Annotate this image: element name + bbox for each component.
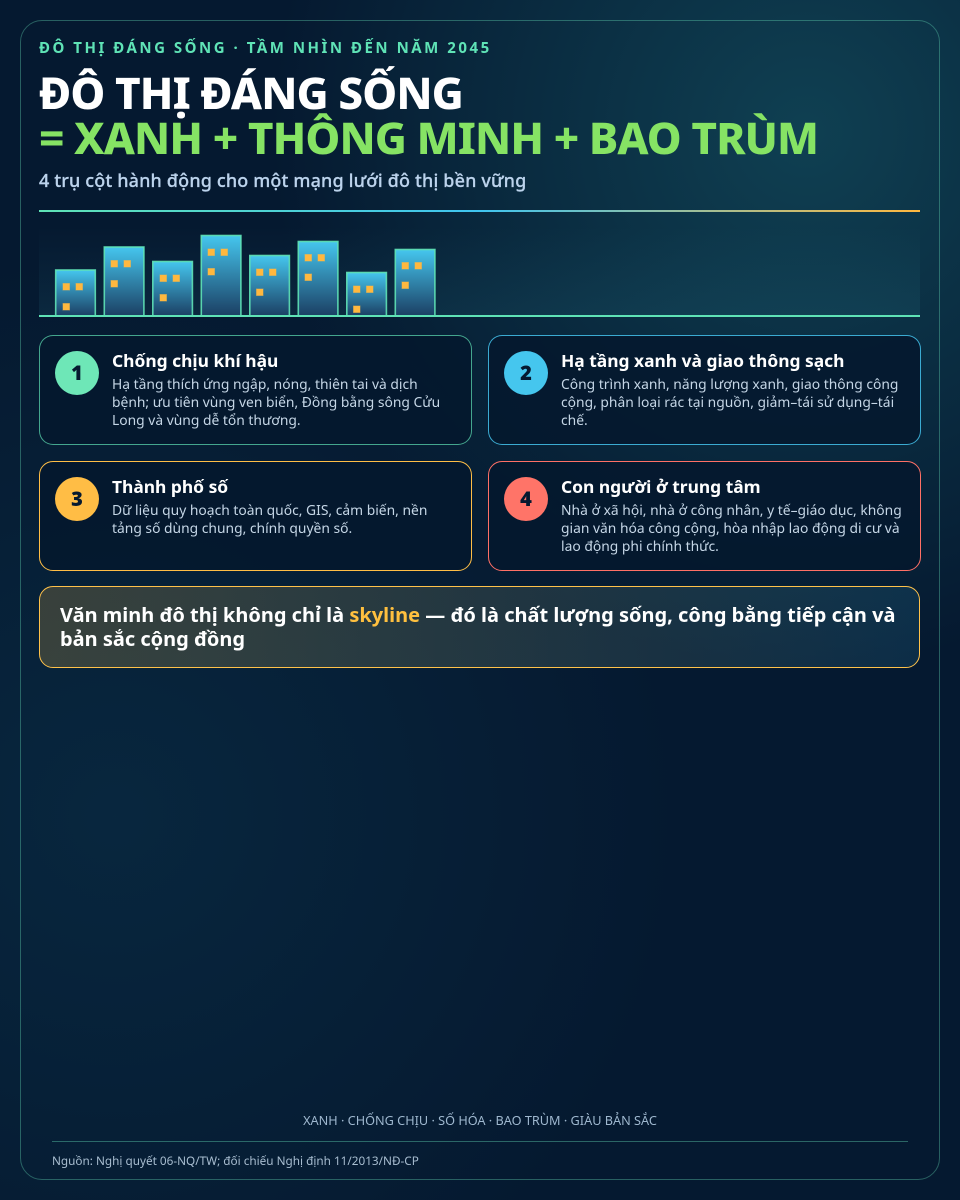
number badge 3: [55, 477, 99, 521]
heading 4: Con người ở trung tâm: [561, 475, 761, 499]
number badge 2: [504, 351, 548, 395]
callout: [39, 586, 920, 668]
source: Nguồn: Nghị quyết 06-NQ/TW; đối chiếu Nghị định 11/2013/NĐ-CP: [52, 1153, 419, 1169]
tagline: XANH · CHỐNG CHỊU · SỐ HÓA · BAO TRÙM · GIÀU BẢN SẮC: [303, 1111, 657, 1129]
text 4: Nhà ở xã hội, nhà ở công nhân, y tế–giáo dục, không gian văn hóa công cộng, hòa nhập lao động di cư và lao động phi chính thức.: [561, 501, 902, 556]
title: ĐÔ THỊ ĐÁNG SỐNG: [39, 62, 463, 122]
text 3: Dữ liệu quy hoạch toàn quốc, GIS, cảm biến, nền tảng số dùng chung, chính quyền số.: [112, 501, 427, 538]
number badge 3: 3: [71, 485, 83, 512]
heading 1: Chống chịu khí hậu: [112, 349, 278, 373]
subtitle: 4 trụ cột hành động cho một mạng lưới đô thị bền vững: [39, 169, 526, 193]
number badge 4: [504, 477, 548, 521]
text 1: Hạ tầng thích ứng ngập, nóng, thiên tai và dịch bệnh; ưu tiên vùng ven biển, Đồng bằng sông Cửu Long và vùng dễ tổn thương.: [112, 375, 440, 430]
number badge 2: 2: [520, 359, 532, 386]
text 2: Công trình xanh, năng lượng xanh, giao thông công cộng, phân loại rác tại nguồn, giảm–tái sử dụng–tái chế.: [561, 375, 898, 430]
heading 3: Thành phố số: [112, 475, 228, 499]
heading 2: Hạ tầng xanh và giao thông sạch: [561, 349, 844, 373]
number badge 4: 4: [520, 485, 532, 512]
callout: Văn minh đô thị không chỉ là skyline — đó là chất lượng sống, công bằng tiếp cận và bản sắc cộng đồng: [60, 601, 895, 652]
number badge 1: 1: [71, 359, 83, 386]
panel: pillar 2: [488, 335, 921, 445]
title: [39, 62, 818, 167]
skyline illustration: [39, 234, 920, 317]
panel: pillar 3: [39, 461, 472, 571]
number badge 1: [55, 351, 99, 395]
panel: pillar 1: [39, 335, 472, 445]
title: = XANH + THÔNG MINH + BAO TRÙM: [39, 107, 818, 167]
eyebrow: ĐÔ THỊ ĐÁNG SỐNG · TẦM NHÌN ĐẾN NĂM 2045: [39, 38, 492, 58]
panel: pillar 4: [488, 461, 921, 571]
